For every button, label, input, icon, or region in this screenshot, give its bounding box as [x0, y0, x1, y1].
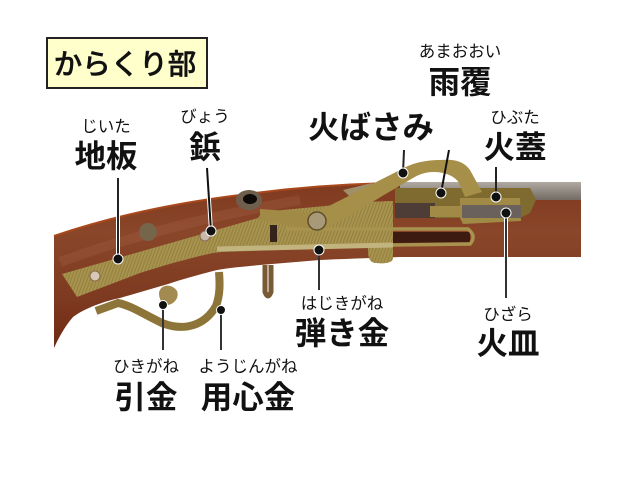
label: 地板: 地板: [74, 138, 138, 174]
stock grain highlight: [60, 200, 300, 262]
pan cover iron: [462, 205, 521, 218]
label: 火皿: 火皿: [476, 325, 540, 361]
gun barrel: [395, 182, 581, 201]
leader: 引金: [158, 300, 168, 350]
dark lock inset: [395, 203, 435, 218]
label: 用心金: ようじんがね: [198, 357, 298, 376]
label: 用心金: [198, 357, 298, 415]
label: 雨覆: 雨覆: [428, 64, 492, 100]
trigger: [159, 286, 178, 305]
plate screw front: [90, 271, 100, 281]
label: 用心金: 用心金: [201, 379, 295, 415]
label: 弾き金: はじきがね: [301, 294, 384, 313]
stock top edge: [54, 183, 395, 236]
lock plate: [395, 188, 536, 218]
spring lower leaf: [217, 245, 393, 249]
wooden stock: [54, 183, 581, 348]
serpentine arm: [317, 160, 482, 230]
barrel band hole: [236, 190, 262, 210]
small rear sight: [343, 183, 376, 199]
trigger guard: [96, 272, 220, 327]
label: 火皿: ひざら: [483, 304, 533, 324]
plate screw byo: [200, 231, 210, 241]
label: 火皿: [476, 304, 540, 361]
label: 火蓋: [483, 108, 547, 165]
label: 鋲: びょう: [180, 107, 230, 126]
engraved lock band: [367, 201, 393, 263]
spring upper leaf: [285, 229, 473, 245]
serpentine rear arm: [260, 209, 317, 229]
label: 雨覆: [419, 42, 501, 100]
sling loop: [265, 265, 271, 296]
stud near plate: [139, 223, 157, 241]
label: 地板: [74, 117, 138, 174]
leader: 鋲: [206, 168, 216, 236]
matchlock gun illustration: [54, 160, 581, 348]
leader: 火ばさみ: [398, 150, 408, 178]
leader: 弾き金: [314, 245, 324, 290]
spring slot: [393, 232, 470, 243]
label: 弾き金: 弾き金: [295, 315, 389, 351]
title box: [47, 38, 207, 88]
label: 雨覆: あまおおい: [419, 42, 501, 61]
label: 火ばさみ: 火ばさみ: [308, 109, 434, 145]
leader: 地板: [113, 178, 123, 264]
pan cover brass frame: [460, 198, 521, 224]
label: 引金: [113, 357, 180, 415]
leader: 雨覆: [436, 150, 449, 198]
label: 鋲: [180, 107, 230, 165]
label: 弾き金: [295, 294, 389, 351]
label: 火蓋: 火蓋: [483, 129, 547, 165]
brass plate (jiita): [62, 201, 393, 297]
plate slots: [270, 225, 277, 242]
leader: 用心金: [216, 306, 226, 350]
serpentine pivot rosette: [308, 212, 326, 230]
label: 引金: ひきがね: [113, 357, 180, 376]
label: 引金: 引金: [114, 379, 178, 415]
title box: からくり部: [54, 49, 196, 81]
leader: 火蓋: [491, 167, 501, 202]
label: 鋲: 鋲: [189, 129, 221, 165]
label: 地板: じいた: [81, 117, 131, 136]
brass tongue: [430, 206, 462, 217]
leader: 火皿: [501, 208, 511, 298]
label: 火蓋: ひぶた: [490, 108, 540, 127]
